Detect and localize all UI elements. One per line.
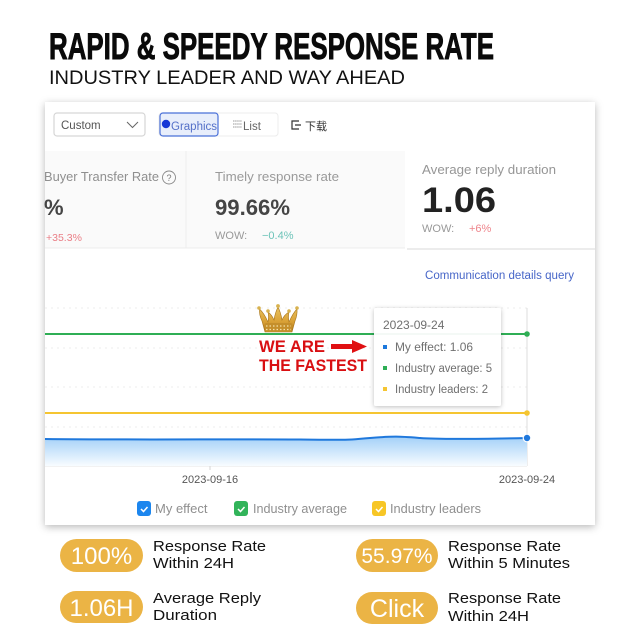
callout: we are the fastest: WE ARE (259, 338, 325, 356)
stat card: average reply duration: +6% (469, 223, 492, 235)
stat card: timely response rate: Timely response rate (215, 170, 339, 184)
stat: 55.97%: 55.97% (361, 545, 433, 568)
stat card: average reply duration: 1.06 (422, 181, 496, 220)
series: my effect area (45, 437, 527, 466)
stat card background (45, 151, 405, 248)
stat card: average reply duration (405, 150, 595, 249)
stat card: average reply duration: Average reply duration (422, 163, 556, 177)
callout: we are the fastest: THE FASTEST (259, 357, 367, 375)
legend: My effect (155, 501, 208, 516)
stat card: timely response rate (215, 170, 339, 242)
stat card: buyer transfer rate: +35.3% (46, 232, 82, 244)
legend (137, 501, 481, 516)
tooltip: My effect: 1.06 (395, 342, 473, 354)
series: industry leaders (45, 412, 527, 414)
dropdown: Custom (54, 113, 145, 136)
panel: dashboard screenshot (44, 102, 595, 525)
stat: 100%: 100% (71, 543, 132, 570)
stat: 55.97% (356, 538, 570, 572)
stat: click: Within 24H (448, 608, 529, 625)
stat: click (356, 590, 561, 625)
stat card: timely response rate: −0.4% (262, 230, 294, 242)
axis labels: 2023-09-16 (182, 474, 238, 486)
line chart (45, 308, 531, 470)
stat: 1.06H: Average Reply (153, 590, 262, 607)
legend: Industry average (253, 501, 347, 516)
stat card: buyer transfer rate: Buyer Transfer Rate (44, 170, 159, 184)
stat: 100% (60, 538, 266, 572)
stat: 1.06H: 1.06H (69, 595, 134, 622)
stat card: average reply duration: WOW: (422, 223, 454, 235)
stat: 55.97%: Within 5 Minutes (448, 555, 570, 572)
subtitle: INDUSTRY LEADER AND WAY AHEAD (49, 67, 405, 89)
series: my effect line (45, 437, 527, 440)
stat: 100%: Response Rate (153, 538, 266, 555)
dropdown: Custom: Custom (61, 120, 101, 132)
axis labels (182, 474, 555, 486)
stat card: buyer transfer rate (44, 170, 176, 244)
legend: Industry leaders (390, 501, 481, 516)
stat: 100%: Within 24H (153, 555, 234, 572)
link: communication details query: Communication details query (425, 270, 574, 282)
stat: 1.06H (60, 590, 262, 624)
toolbar (54, 113, 327, 136)
stat: click: Click (370, 595, 425, 623)
tooltip: 2023-09-24 (383, 318, 445, 332)
arrow (331, 340, 367, 353)
stat: 1.06H: Duration (153, 607, 217, 624)
callout: we are the fastest (259, 338, 367, 375)
tooltip (374, 308, 501, 406)
stat card: buyer transfer rate: ? (166, 173, 172, 183)
toggle: Graphics / List: List (243, 121, 262, 133)
tooltip: Industry average: 5 (395, 363, 492, 375)
tooltip: Industry leaders: 2 (395, 384, 488, 396)
toggle: Graphics / List (159, 113, 278, 136)
stat: click: Response Rate (448, 590, 561, 607)
icon: crown (257, 304, 299, 332)
stat: 55.97%: Response Rate (448, 538, 561, 555)
stat card: timely response rate: 99.66% (215, 195, 290, 220)
download button: 下载 (305, 120, 327, 133)
download button (292, 120, 327, 133)
toggle: Graphics / List: Graphics (171, 121, 217, 133)
series: industry average (45, 333, 527, 335)
axis labels: 2023-09-24 (499, 474, 555, 486)
stat card: timely response rate: WOW: (215, 230, 247, 242)
stat card: buyer transfer rate: % (44, 195, 64, 220)
